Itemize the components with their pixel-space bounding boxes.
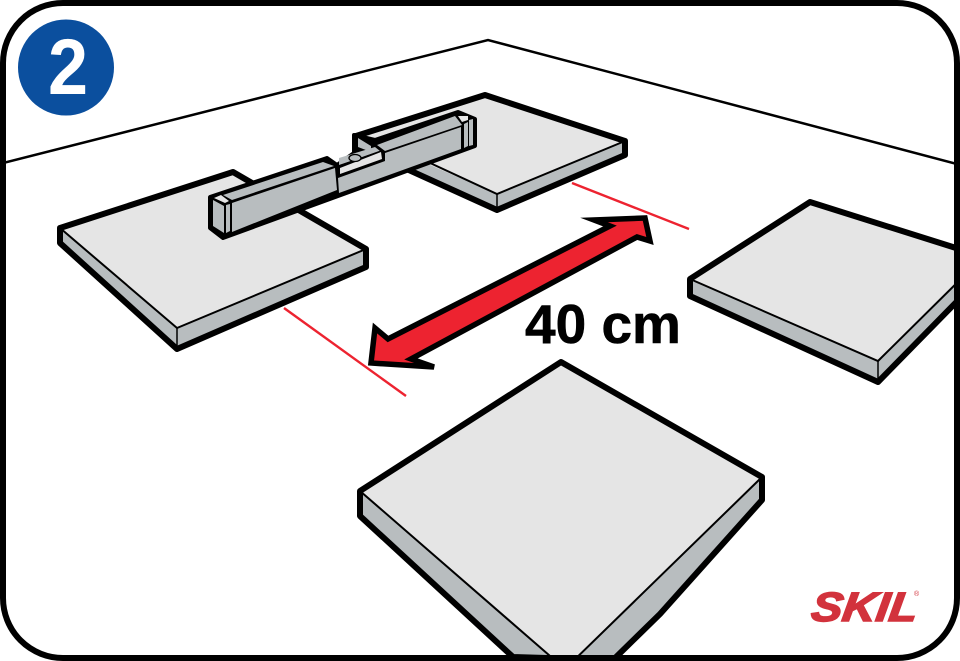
- level back end piece: [358, 138, 371, 150]
- level top face left: [223, 162, 334, 200]
- spirit level: [210, 112, 475, 238]
- slab: back: [356, 95, 625, 210]
- level black outline: [210, 112, 475, 238]
- logo: SKIL: ®: [914, 590, 920, 598]
- wall and floor corner lines: [3, 40, 957, 164]
- label: 40 cm: 40 cm: [525, 293, 681, 355]
- logo: SKIL: [810, 590, 920, 622]
- level top face right: [377, 116, 462, 151]
- level bubble: [349, 154, 361, 162]
- level front face right of window: [338, 127, 461, 193]
- slab: right: [690, 202, 960, 382]
- level left end face: [213, 200, 224, 233]
- step number badge: 2: [48, 23, 88, 112]
- red guide line left: [284, 308, 406, 396]
- level front face left: [232, 168, 337, 232]
- logo: SKIL: SKIL: [809, 584, 921, 630]
- level left end highlight: [214, 195, 229, 203]
- step number badge: [18, 20, 114, 116]
- level end strip right: [464, 122, 468, 148]
- slab: left: [60, 172, 366, 349]
- level window light strip: [339, 147, 380, 165]
- double arrow: 40 cm: [371, 218, 650, 367]
- red guide line right: [572, 183, 689, 229]
- level right end highlight: [458, 116, 468, 122]
- slab: front: [360, 362, 762, 661]
